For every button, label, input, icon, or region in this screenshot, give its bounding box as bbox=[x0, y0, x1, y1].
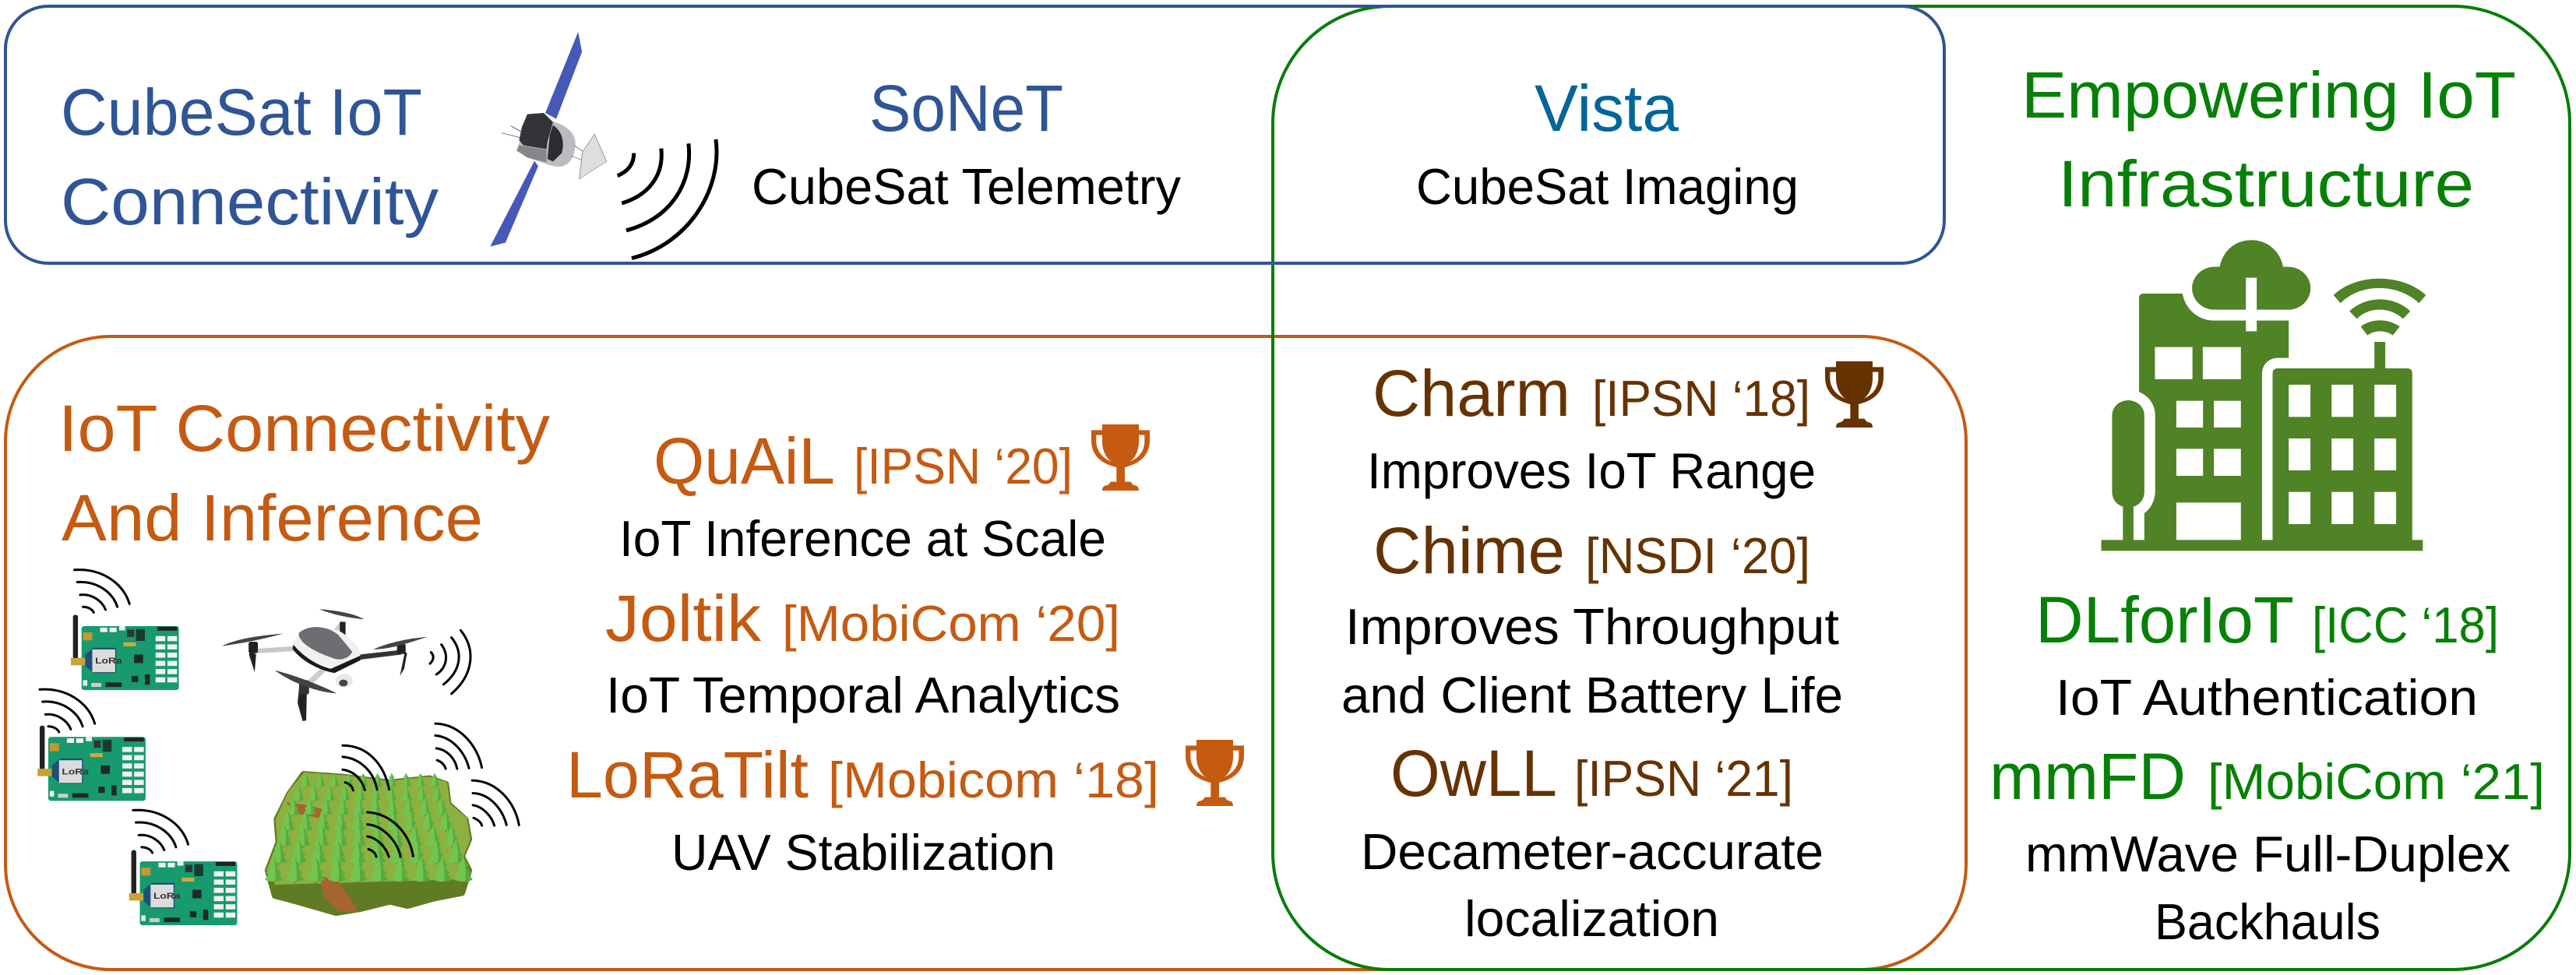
icon: smart building with cloud and wifi bbox=[2101, 240, 2426, 551]
description: mmWave Full-Duplex Backhauls: Backhauls bbox=[2155, 893, 2380, 950]
icon: trophy bbox=[1091, 424, 1150, 491]
project: DLforIoT bbox=[2035, 583, 2499, 656]
panel: CubeSat IoT connectivity (blue) bbox=[5, 6, 1944, 263]
illustration: LoRa boards, drone and forest bbox=[37, 570, 519, 925]
project: Charm: [IPSN ‘18] bbox=[1592, 370, 1810, 427]
description: Improves Throughput and Client Battery Life: and Client Battery Life bbox=[1341, 667, 1843, 723]
description: Decameter-accurate localization: Decameter-accurate bbox=[1361, 823, 1824, 880]
heading: Empowering IoT Infrastructure: Infrastructure bbox=[2058, 147, 2474, 220]
icon: LoRa board 3 bbox=[129, 810, 237, 925]
panel: IoT connectivity and inference (orange) bbox=[5, 336, 1966, 970]
project: DLforIoT: DLforIoT bbox=[2035, 583, 2294, 656]
description: IoT Inference at Scale: IoT Inference at Scale bbox=[619, 510, 1106, 567]
heading: Empowering IoT Infrastructure: Empowering IoT bbox=[2021, 58, 2516, 132]
panel: empowering IoT infrastructure (green) bbox=[1273, 6, 2570, 970]
icon: forest plot with signal waves bbox=[265, 723, 519, 913]
heading: IoT Connectivity And Inference: And Inference bbox=[62, 481, 483, 554]
project: SoNeT: SoNeT bbox=[869, 72, 1063, 145]
icon: drone bbox=[222, 609, 470, 721]
project: LoRaTilt: [Mobicom ‘18] bbox=[828, 751, 1159, 808]
project: Charm: Charm bbox=[1373, 357, 1570, 430]
icon: trophy bbox=[1825, 361, 1884, 428]
heading: CubeSat IoT Connectivity: Connectivity bbox=[61, 165, 439, 238]
description: mmWave Full-Duplex Backhauls: mmWave Full-Duplex bbox=[2025, 825, 2511, 882]
icon: LoRa board 2 bbox=[37, 689, 146, 801]
project: Vista: Vista bbox=[1535, 72, 1679, 145]
description: IoT Authentication: IoT Authentication bbox=[2056, 669, 2478, 726]
description: Improves Throughput and Client Battery Life: Improves Throughput bbox=[1345, 598, 1839, 655]
heading: Empowering IoT Infrastructure bbox=[2021, 58, 2516, 220]
description: CubeSat Imaging: CubeSat Imaging bbox=[1416, 158, 1799, 215]
project: OwLL: [IPSN ‘21] bbox=[1574, 750, 1793, 807]
project: Joltik: [MobiCom ‘20] bbox=[782, 595, 1120, 652]
description: Decameter-accurate localization: localization bbox=[1464, 890, 1719, 947]
icon: LoRa board 2: LoRa bbox=[62, 767, 89, 776]
icon: LoRa board 1: LoRa bbox=[95, 656, 122, 666]
heading: IoT Connectivity And Inference: IoT Connectivity bbox=[58, 392, 550, 465]
project: Chime bbox=[1373, 514, 1810, 587]
project: mmFD bbox=[1989, 740, 2545, 813]
project: QuAiL bbox=[654, 424, 1073, 498]
project: DLforIoT: [ICC ‘18] bbox=[2312, 597, 2499, 653]
project: mmFD: [MobiCom ‘21] bbox=[2208, 753, 2545, 810]
project: LoRaTilt: LoRaTilt bbox=[566, 738, 809, 811]
project: OwLL: OwLL bbox=[1390, 737, 1557, 810]
icon: LoRa board 3: LoRa bbox=[153, 892, 181, 901]
project: Chime: [NSDI ‘20] bbox=[1585, 527, 1810, 584]
project: mmFD: mmFD bbox=[1989, 740, 2186, 813]
description: IoT Temporal Analytics: IoT Temporal Analytics bbox=[606, 667, 1120, 723]
project: Chime: Chime bbox=[1373, 514, 1565, 587]
project: Joltik: Joltik bbox=[605, 582, 762, 655]
description: Decameter-accurate localization bbox=[1361, 823, 1824, 947]
description: CubeSat Telemetry: CubeSat Telemetry bbox=[752, 158, 1181, 215]
project: Charm bbox=[1373, 357, 1810, 430]
heading: CubeSat IoT Connectivity: CubeSat IoT bbox=[61, 76, 422, 149]
description: mmWave Full-Duplex Backhauls bbox=[2025, 825, 2511, 950]
project: Joltik bbox=[605, 582, 1120, 655]
heading: CubeSat IoT Connectivity bbox=[61, 76, 439, 238]
icon: trophy bbox=[1186, 740, 1244, 806]
description: UAV Stabilization: UAV Stabilization bbox=[671, 824, 1055, 881]
project: QuAiL: QuAiL bbox=[654, 424, 835, 498]
icon: LoRa board 1 bbox=[71, 570, 179, 690]
project: OwLL bbox=[1390, 737, 1793, 810]
description: Improves IoT Range: Improves IoT Range bbox=[1367, 442, 1816, 499]
description: Improves Throughput and Client Battery Life bbox=[1341, 598, 1843, 723]
heading: IoT Connectivity And Inference bbox=[58, 392, 550, 554]
project: QuAiL: [IPSN ‘20] bbox=[854, 438, 1073, 495]
icon: satellite with signal waves bbox=[490, 32, 717, 259]
project: LoRaTilt bbox=[566, 738, 1159, 811]
